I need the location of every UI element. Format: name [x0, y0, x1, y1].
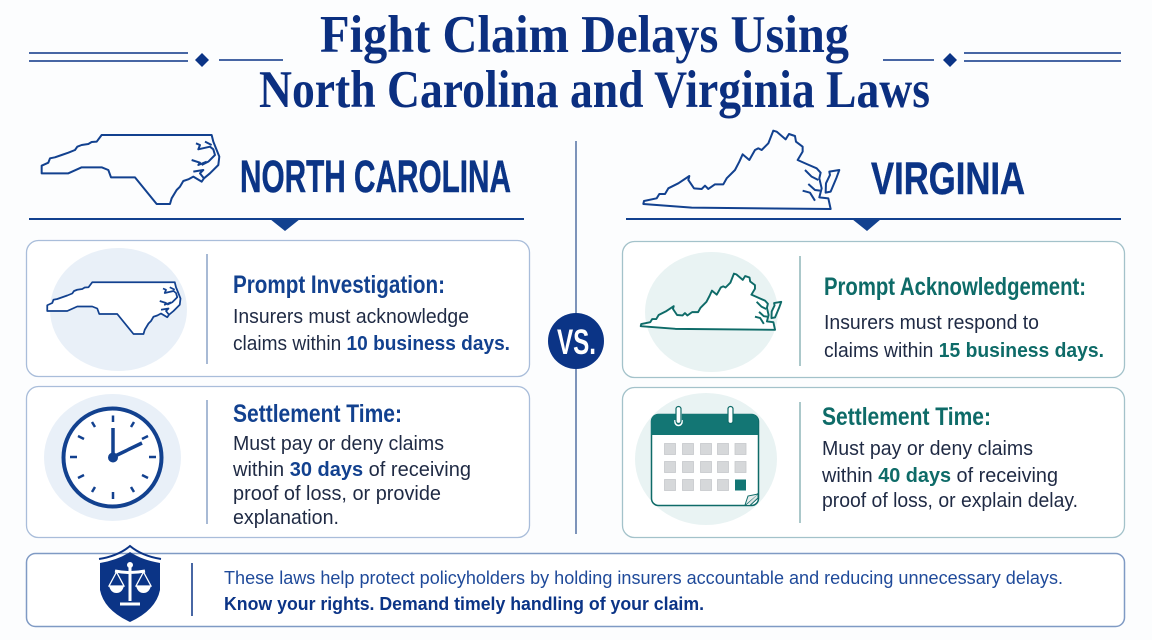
text: Settlement Time North Carolina: Settlement Time:	[233, 400, 402, 428]
card: Settlement Time Virginia	[622, 388, 1124, 538]
text: Prompt Investigation: Prompt Investigation:	[233, 271, 445, 299]
icon: Virginia outline	[643, 131, 839, 209]
text: footer message: These laws help protect policyholders by holding insurers accountable and reducing unnecessary delays.	[224, 568, 1063, 588]
text: Settlement Time North Carolina: proof of loss, or provide	[233, 483, 441, 505]
icon: North Carolina map in circle	[47, 248, 187, 371]
title: Fight Claim Delays Using	[320, 6, 849, 64]
text: footer message	[224, 568, 1063, 614]
text: Settlement Time Virginia	[821, 403, 1078, 512]
text: Prompt Investigation: claims within 10 business days.	[233, 333, 510, 355]
center divider	[575, 141, 577, 534]
text: Settlement Time North Carolina: Must pay or deny claims	[233, 433, 444, 455]
text: Settlement Time North Carolina	[232, 400, 471, 529]
icon: shield with scales	[99, 546, 161, 622]
title ornament: right	[883, 53, 1121, 67]
text: Settlement Time Virginia: Must pay or deny claims	[822, 438, 1033, 460]
text: footer message: Know your rights. Demand timely handling of your claim.	[224, 594, 704, 614]
badge: VS.	[548, 313, 604, 369]
icon: Virginia map in circle	[641, 252, 781, 372]
title: North Carolina and Virginia Laws	[259, 61, 930, 119]
header rule	[29, 218, 524, 231]
card: Prompt Acknowledgement	[622, 242, 1124, 378]
header rule	[626, 218, 1121, 231]
text: Prompt Acknowledgement: Insurers must respond to	[824, 312, 1039, 334]
text: Settlement Time Virginia: Settlement Time:	[822, 403, 991, 431]
text: Prompt Investigation	[233, 271, 510, 355]
text: Settlement Time North Carolina: within 30 days of receiving	[232, 459, 471, 481]
text: Settlement Time Virginia: within 40 days of receiving	[821, 465, 1058, 487]
heading: Virginia: VIRGINIA	[871, 153, 1025, 204]
icon: clock	[44, 394, 181, 521]
card: Settlement Time North Carolina	[26, 386, 530, 538]
icon: North Carolina outline	[42, 135, 219, 204]
title	[259, 6, 930, 119]
text: Prompt Investigation: Insurers must acknowledge	[233, 306, 469, 328]
text: Prompt Acknowledgement	[824, 273, 1104, 362]
text: Prompt Acknowledgement: Prompt Acknowledgement:	[824, 273, 1086, 301]
text: Settlement Time North Carolina: explanation.	[233, 507, 339, 529]
panel: North Carolina header	[29, 135, 524, 231]
icon: calendar	[635, 393, 777, 525]
heading: North Carolina: NORTH CAROLINA	[240, 151, 511, 202]
panel: footer callout	[26, 546, 1124, 626]
text: Prompt Acknowledgement: claims within 15 business days.	[824, 340, 1104, 362]
text: Settlement Time Virginia: proof of loss, or explain delay.	[822, 490, 1078, 512]
card: Prompt Investigation	[26, 240, 530, 376]
panel: Virginia header	[626, 131, 1121, 231]
badge: VS.: VS.	[557, 323, 596, 362]
title ornament: left	[29, 53, 283, 67]
